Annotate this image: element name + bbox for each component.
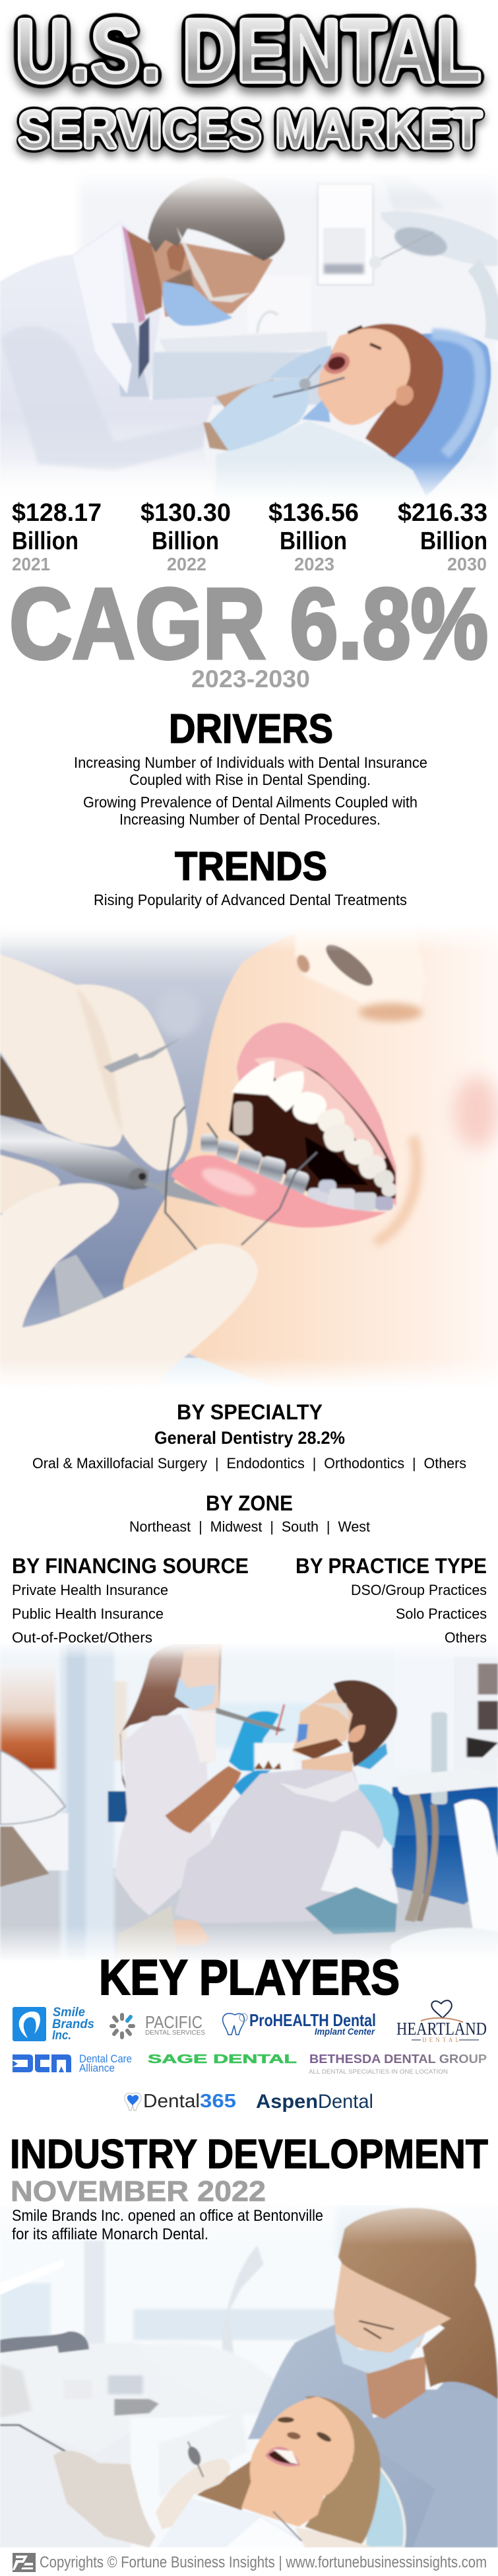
trends section [94, 844, 407, 908]
industry development section: Smile Brands Inc. opened an office at Bentonville [12, 2207, 323, 2225]
value 2023 [268, 499, 359, 574]
value 2022 [140, 499, 231, 574]
by specialty segment: BY SPECIALTY [177, 1400, 323, 1424]
footer [0, 2548, 498, 2576]
by practice type segment: Others [445, 1629, 487, 1646]
drivers section: Coupled with Rise in Dental Spending. [129, 771, 371, 788]
gloved hands and tools [210, 345, 344, 451]
logo: Smile Brands: Brands [52, 2017, 94, 2031]
by financing source segment: Public Health Insurance [12, 1606, 164, 1622]
logo: Dental365: Dental [143, 2091, 200, 2112]
key players heading: KEY PLAYERS [99, 1949, 400, 2005]
value 2022: $130.30 [140, 499, 231, 527]
by financing source segment: Out-of-Pocket/Others [12, 1629, 152, 1646]
logo: Aspen Dental: Aspen [256, 2091, 318, 2113]
image: close-up of dental procedure [0, 924, 498, 1400]
logo: ProHEALTH Dental: Implant Center [315, 2026, 375, 2037]
logo: Bethesda Dental Group: ALL DENTAL SPECIALTIES IN ONE LOCATION [309, 2068, 448, 2075]
smiling child [157, 2396, 405, 2548]
logo: Heartland Dental: DENTAL [422, 2037, 459, 2043]
title [15, 1, 482, 160]
value 2021: Billion [12, 527, 78, 555]
logo: Aspen Dental: Dental [318, 2091, 373, 2113]
value 2030: 2030 [447, 554, 487, 574]
open mouth and teeth [171, 1023, 396, 1228]
value 2023: Billion [280, 527, 347, 555]
by financing source segment: Private Health Insurance [12, 1582, 168, 1598]
drivers section [74, 706, 427, 828]
by zone segment: Northeast | Midwest | South | West [129, 1518, 370, 1535]
drivers section: Increasing Number of Individuals with Dental Insurance [74, 754, 427, 771]
drivers section: DRIVERS [169, 706, 333, 752]
logo: Dental Care Alliance: Dental Care [79, 2052, 132, 2065]
by zone segment [129, 1491, 370, 1535]
value 2023: 2023 [294, 554, 334, 574]
front glove [0, 1183, 258, 1400]
by specialty segment [32, 1400, 466, 1472]
icon: Fortune Business Insights logo [13, 2553, 36, 2572]
dentist [0, 177, 285, 502]
value 2021 [12, 499, 102, 574]
logo: Smile Brands: Smile [53, 2006, 85, 2019]
value 2021: 2021 [12, 554, 50, 574]
gloved hands and mirror [53, 2441, 375, 2548]
by specialty segment: Oral & Maxillofacial Surgery | Endodontics | Orthodontics | Others [32, 1455, 466, 1472]
by financing source segment: BY FINANCING SOURCE [12, 1554, 249, 1578]
logo: Dental Care Alliance: Alliance [79, 2062, 115, 2074]
dental unit left [0, 1751, 65, 1887]
by practice type segment: BY PRACTICE TYPE [296, 1554, 487, 1578]
value 2022: Billion [152, 527, 219, 555]
logo: Bethesda Dental Group [309, 2052, 487, 2075]
logo: Pacific Dental Services: PACIFIC [145, 2012, 202, 2032]
seated male patient [117, 1680, 398, 1967]
key players logos [13, 2000, 487, 2113]
logo: Dental365 [125, 2091, 236, 2112]
by specialty segment: General Dentistry 28.2% [154, 1428, 345, 1448]
drivers section: Increasing Number of Dental Procedures. [119, 811, 381, 828]
drivers section: Growing Prevalence of Dental Ailments Coupled with [83, 794, 418, 811]
CAGR figure: 2023-2030 [191, 665, 310, 693]
trends section: Rising Popularity of Advanced Dental Treatments [94, 891, 407, 908]
logo: Sage Dental: SAGE DENTAL [148, 2052, 297, 2066]
image: dentist examining male patient [0, 1637, 498, 1974]
logo: Heartland Dental [396, 2000, 487, 2043]
logo: Smile Brands [13, 2006, 94, 2043]
value 2030: Billion [420, 527, 487, 555]
industry development section: NOVEMBER 2022 [11, 2175, 266, 2208]
image: dentist treating patient [0, 170, 498, 502]
value 2030 [398, 499, 487, 574]
value 2021: $128.17 [12, 499, 102, 527]
logo: Dental365: 365 [200, 2091, 236, 2112]
value 2030: $216.33 [398, 499, 487, 527]
by practice type segment [296, 1554, 487, 1646]
dental handpiece and probes [0, 1038, 317, 1315]
logo: ProHEALTH Dental [223, 2010, 376, 2037]
by practice type segment: DSO/Group Practices [351, 1582, 487, 1598]
logo: Bethesda Dental Group: BETHESDA DENTAL GROUP [309, 2052, 487, 2066]
value 2022: 2022 [167, 554, 206, 574]
industry development section [10, 2132, 488, 2243]
logo: Pacific Dental Services: DENTAL SERVICES [145, 2029, 205, 2037]
logo: Smile Brands: Inc. [52, 2029, 71, 2043]
logo: ProHEALTH Dental: ProHEALTH Dental [249, 2010, 376, 2030]
industry development section: for its affiliate Monarch Dental. [12, 2225, 208, 2243]
by practice type segment: Solo Practices [396, 1606, 487, 1622]
dentist in white uniform [114, 1639, 286, 1916]
value 2023: $136.56 [268, 499, 359, 527]
patient face [123, 924, 498, 1400]
dentist woman [248, 2208, 498, 2548]
dental equipment arm [390, 1712, 498, 1967]
patient in chair [216, 323, 498, 502]
by zone segment: BY ZONE [206, 1491, 293, 1515]
gloved hands [0, 955, 187, 1214]
logo: Dental Care Alliance [13, 2052, 132, 2074]
image: dentist with smiling child [0, 2205, 498, 2548]
by financing source segment [12, 1554, 249, 1646]
logo: Aspen Dental [256, 2091, 373, 2113]
trends section: TRENDS [175, 844, 327, 889]
logo: Pacific Dental Services [111, 2012, 205, 2037]
market values row [12, 499, 487, 574]
